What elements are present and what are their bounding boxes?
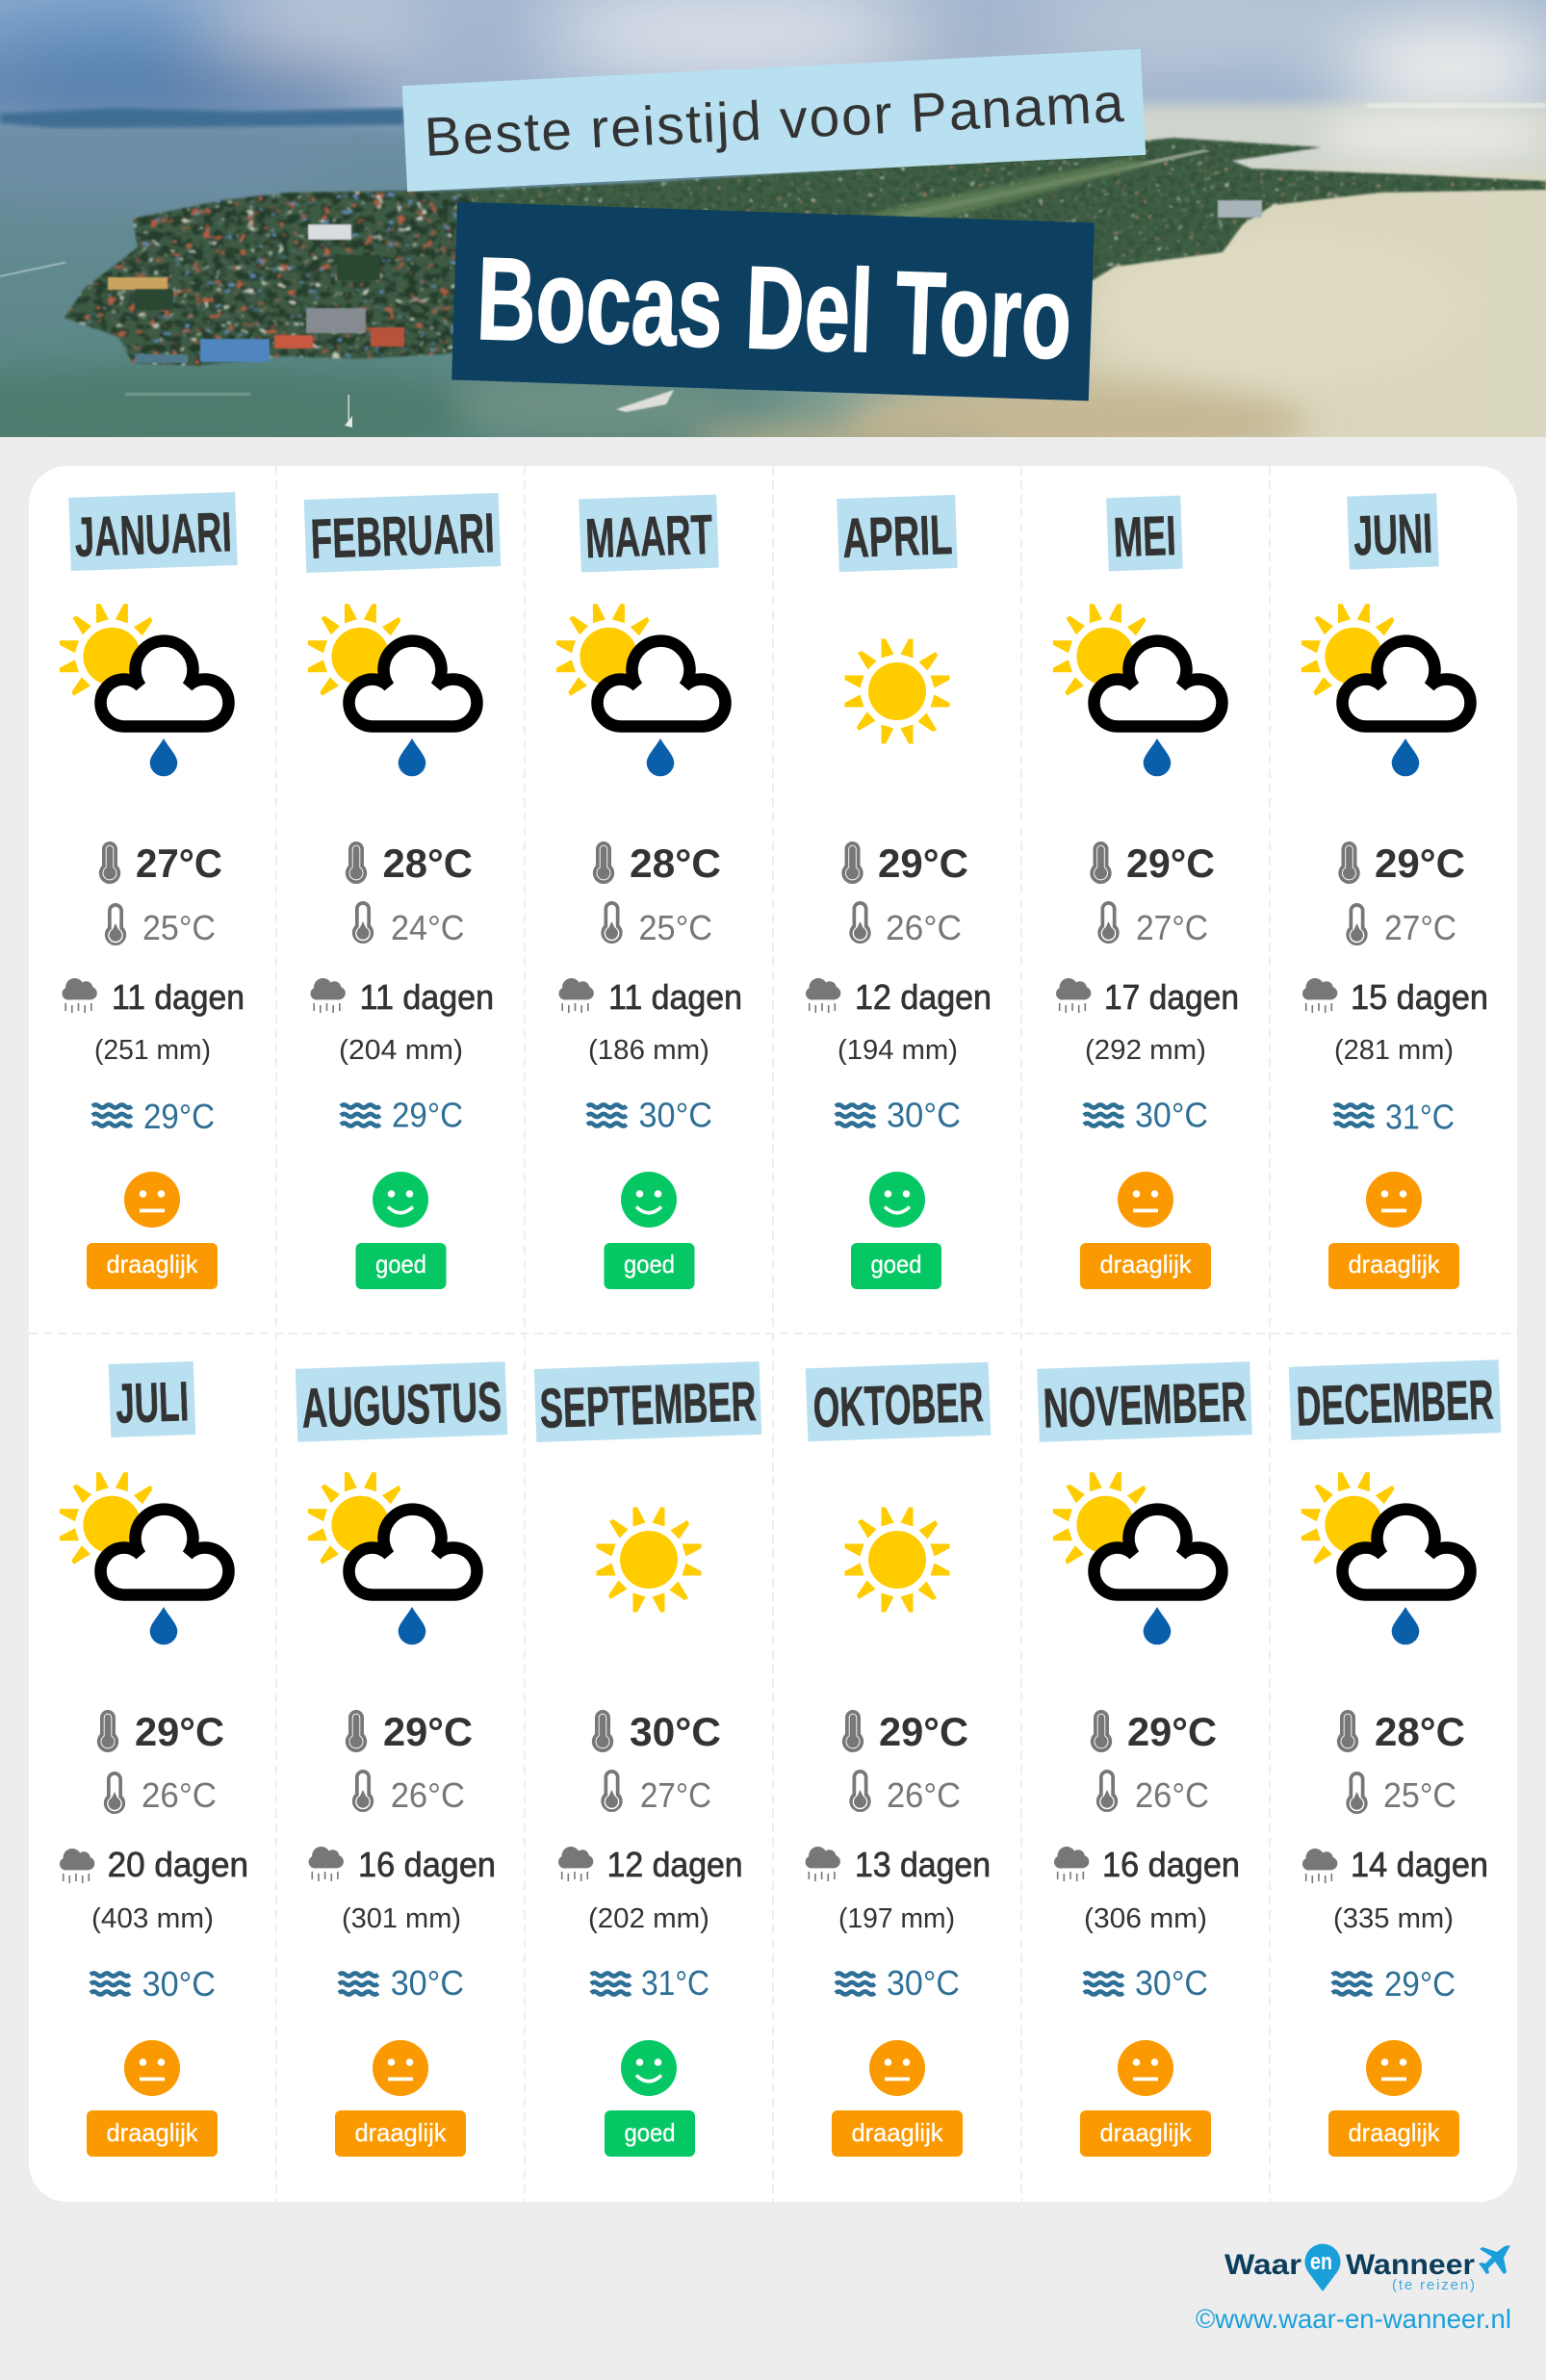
rainfall: (306 mm) — [1084, 1903, 1207, 1934]
heading: April: APRIL — [841, 504, 953, 570]
sea temperature: 30°C — [1135, 1963, 1208, 2003]
sea temperature: 30°C — [887, 1096, 961, 1134]
icon: sun, cloud and rain — [308, 1472, 477, 1644]
month: Juni — [1301, 493, 1488, 1289]
rainy days: 17 dagen — [1104, 977, 1239, 1017]
icon: neutral face — [869, 2040, 925, 2096]
icon: min temperature — [601, 901, 623, 944]
icon: max temperature — [1338, 841, 1360, 884]
rainfall: (204 mm) — [339, 1035, 463, 1066]
icon: airplane — [1479, 2245, 1510, 2274]
rainy days: 20 dagen — [108, 1845, 248, 1884]
rating badge — [605, 2110, 695, 2157]
icon: max temperature — [592, 1710, 613, 1752]
min temperature: 26°C — [1135, 1775, 1209, 1815]
rating badge: draaglijk — [1099, 1250, 1192, 1279]
max temperature: 29°C — [1127, 1709, 1217, 1754]
icon: max temperature — [841, 841, 863, 884]
icon: sun, cloud and rain — [1053, 604, 1223, 776]
icon: max temperature — [99, 841, 120, 884]
icon: max temperature — [593, 841, 614, 884]
rating badge — [851, 1243, 941, 1289]
rainfall: (335 mm) — [1333, 1903, 1454, 1934]
rainy days: 11 dagen — [608, 977, 742, 1017]
rating badge: goed — [624, 1250, 675, 1279]
icon: min temperature — [1096, 1770, 1118, 1812]
sea temperature: 29°C — [392, 1096, 463, 1134]
heading: Augustus — [296, 1361, 507, 1442]
month: April — [806, 495, 992, 1289]
icon: min temperature — [849, 1770, 871, 1812]
heading: Mei — [1106, 496, 1183, 571]
panel: monthly climate table — [29, 466, 1517, 2202]
peninsula — [404, 138, 1546, 349]
max temperature: 28°C — [383, 841, 473, 886]
rainy days: 16 dagen — [1102, 1845, 1240, 1884]
rating badge — [87, 1243, 218, 1289]
rating badge — [1080, 2110, 1211, 2157]
icon: sun, cloud and rain — [60, 604, 229, 776]
heading: November: NOVEMBER — [1043, 1370, 1248, 1440]
icon: min temperature — [601, 1770, 623, 1812]
rating badge — [1328, 1243, 1459, 1289]
title banner — [451, 202, 1095, 401]
month: Juli — [60, 1361, 248, 2157]
max temperature: 29°C — [1375, 841, 1465, 886]
heading: September: SEPTEMBER — [539, 1370, 758, 1440]
title banner: Bocas Del Toro — [475, 233, 1073, 383]
icon: sun, cloud and rain — [1301, 604, 1471, 776]
heading: September — [534, 1361, 761, 1442]
sea temperature: 30°C — [391, 1963, 464, 2003]
icon: neutral face — [373, 2040, 428, 2096]
rainy days: 14 dagen — [1351, 1845, 1488, 1884]
rainfall: (292 mm) — [1085, 1035, 1206, 1066]
month: Januari — [60, 492, 245, 1289]
heading: Juni: JUNI — [1353, 503, 1433, 567]
rating badge: draaglijk — [106, 2118, 198, 2147]
icon: sun, cloud and rain — [308, 604, 477, 776]
rating badge: draaglijk — [1348, 1250, 1440, 1279]
icon: max temperature — [842, 1710, 863, 1752]
icon: neutral face — [124, 1172, 180, 1228]
rainfall: (251 mm) — [94, 1035, 211, 1066]
icon: min temperature — [352, 1770, 374, 1812]
heading: Februari — [304, 493, 501, 573]
rating badge: draaglijk — [106, 1250, 198, 1279]
icon: min temperature — [849, 901, 871, 944]
max temperature: 29°C — [878, 841, 968, 886]
icon: happy face — [621, 2040, 677, 2096]
heading: Maart — [579, 495, 719, 572]
rating badge — [832, 2110, 963, 2157]
min temperature: 27°C — [640, 1775, 711, 1815]
sea temperature: 31°C — [1385, 1098, 1455, 1136]
icon: rain cloud — [62, 978, 97, 1013]
max temperature: 28°C — [630, 841, 721, 886]
min temperature: 24°C — [391, 908, 464, 947]
rainfall: (186 mm) — [588, 1035, 709, 1066]
heading: Maart: MAART — [584, 504, 713, 570]
rating badge: goed — [375, 1250, 426, 1279]
icon: rain cloud — [1056, 978, 1091, 1013]
icon: min temperature — [104, 1772, 125, 1814]
icon: rain cloud — [1302, 1849, 1337, 1883]
icon: sun — [845, 1508, 949, 1612]
icon: waves — [90, 1974, 130, 1995]
sea temperature: 29°C — [143, 1097, 215, 1136]
month: Augustus — [296, 1361, 507, 2157]
subtitle banner: Beste reistijd voor Panama — [423, 72, 1125, 168]
logo: Waar en Wanneer — [1224, 2244, 1510, 2293]
heading: Januari — [68, 492, 238, 571]
max temperature: 29°C — [879, 1709, 968, 1754]
min temperature: 26°C — [887, 1775, 961, 1815]
heading: Juli — [109, 1361, 195, 1437]
icon: rain cloud — [806, 978, 840, 1013]
max temperature: 29°C — [1126, 841, 1215, 886]
icon: map pin — [1305, 2244, 1341, 2291]
heading: Oktober: OKTOBER — [812, 1371, 985, 1439]
icon: max temperature — [1337, 1710, 1358, 1752]
icon: rain cloud — [806, 1847, 840, 1881]
icon: waves — [1332, 1974, 1372, 1995]
icon: rain cloud — [309, 1847, 344, 1881]
min temperature: 25°C — [142, 908, 216, 947]
month: September — [534, 1361, 761, 2157]
min temperature: 26°C — [391, 1775, 465, 1815]
icon: min temperature — [1346, 1772, 1368, 1814]
month: Mei — [1053, 496, 1239, 1289]
icon: rain cloud — [1302, 978, 1337, 1013]
icon: neutral face — [1118, 2040, 1173, 2096]
icon: happy face — [373, 1172, 428, 1228]
month: Februari — [304, 493, 501, 1289]
heading: Juni — [1347, 493, 1439, 570]
icon: max temperature — [1091, 1710, 1112, 1752]
month: November — [1037, 1361, 1252, 2157]
logo: Waar en Wanneer: Wanneer — [1346, 2249, 1475, 2281]
icon: happy face — [621, 1172, 677, 1228]
rating badge — [605, 1243, 695, 1289]
icon: waves — [836, 1974, 875, 1995]
rating badge — [1328, 2110, 1459, 2157]
icon: min temperature — [1346, 903, 1368, 945]
icon: sun, cloud and rain — [1301, 1472, 1471, 1644]
heading: November — [1037, 1361, 1252, 1442]
rainy days: 15 dagen — [1351, 977, 1488, 1017]
icon: sun, cloud and rain — [60, 1472, 229, 1644]
month: Maart — [556, 495, 742, 1289]
rainy days: 12 dagen — [607, 1845, 743, 1884]
icon: sun — [845, 639, 949, 743]
icon: min temperature — [1097, 901, 1120, 944]
icon: neutral face — [1366, 1172, 1422, 1228]
icon: rain cloud — [60, 1849, 94, 1883]
sea temperature: 30°C — [142, 1964, 216, 2004]
rainfall: (301 mm) — [342, 1903, 461, 1934]
rainfall: (281 mm) — [1334, 1035, 1454, 1066]
heading: April — [837, 495, 958, 572]
icon: waves — [836, 1105, 875, 1126]
rating badge: draaglijk — [851, 2118, 943, 2147]
heading: Oktober — [806, 1362, 991, 1441]
icon: max temperature — [346, 1710, 367, 1752]
icon: min temperature — [105, 903, 126, 945]
rating badge — [356, 1243, 447, 1289]
sea temperature: 31°C — [641, 1963, 709, 2003]
rainfall: (403 mm) — [91, 1903, 214, 1934]
rainfall: (194 mm) — [837, 1035, 958, 1066]
min temperature: 25°C — [1383, 1775, 1456, 1815]
icon: sun, cloud and rain — [1053, 1472, 1223, 1644]
min temperature: 27°C — [1384, 908, 1456, 947]
rainy days: 12 dagen — [855, 977, 992, 1017]
subtitle banner — [402, 49, 1146, 192]
rating badge — [335, 2110, 466, 2157]
sea temperature: 30°C — [1135, 1096, 1208, 1134]
icon: max temperature — [97, 1710, 118, 1752]
icon: waves — [339, 1974, 378, 1995]
icon: rain cloud — [1054, 1847, 1089, 1881]
heading: Februari: FEBRUARI — [310, 502, 496, 571]
max temperature: 29°C — [135, 1709, 224, 1754]
icon: waves — [591, 1974, 631, 1995]
icon: neutral face — [1366, 2040, 1422, 2096]
sea temperature: 30°C — [887, 1963, 960, 2003]
logo: Waar en Wanneer: (te reizen) — [1392, 2277, 1475, 2293]
rating badge: goed — [870, 1250, 922, 1279]
sea temperature: 29°C — [1384, 1964, 1456, 2004]
max temperature: 28°C — [1375, 1709, 1465, 1754]
max temperature: 27°C — [136, 841, 222, 886]
icon: min temperature — [352, 901, 374, 944]
sea temperature: 30°C — [639, 1096, 712, 1134]
rainy days: 11 dagen — [112, 977, 245, 1017]
month: Oktober — [806, 1362, 991, 2157]
logo: Waar en Wanneer: Waar — [1224, 2249, 1301, 2281]
icon: waves — [92, 1105, 132, 1126]
icon: neutral face — [124, 2040, 180, 2096]
min temperature: 26°C — [142, 1775, 217, 1815]
min temperature: 26°C — [886, 908, 962, 947]
month: December — [1289, 1359, 1501, 2157]
icon: happy face — [869, 1172, 925, 1228]
rating badge — [1080, 1243, 1211, 1289]
icon: max temperature — [346, 841, 367, 884]
icon: rain cloud — [558, 1847, 593, 1881]
icon: waves — [1334, 1105, 1374, 1126]
icon: rain cloud — [310, 978, 346, 1013]
rainfall: (202 mm) — [588, 1903, 709, 1934]
town — [64, 191, 472, 366]
icon: waves — [341, 1105, 380, 1126]
heading: Juli: JULI — [115, 1370, 190, 1436]
max temperature: 30°C — [630, 1709, 721, 1754]
icon: rain cloud — [558, 978, 594, 1013]
rating badge: draaglijk — [354, 2118, 447, 2147]
icon: neutral face — [1118, 1172, 1173, 1228]
rainy days: 13 dagen — [855, 1845, 991, 1884]
icon: max temperature — [1090, 841, 1112, 884]
icon: waves — [1084, 1105, 1123, 1126]
website credit: ©www.waar-en-wanneer.nl — [1196, 2304, 1511, 2334]
rainy days: 16 dagen — [358, 1845, 496, 1884]
logo: Waar en Wanneer: en — [1310, 2249, 1332, 2275]
rating badge: draaglijk — [1099, 2118, 1192, 2147]
heading: Mei: MEI — [1113, 504, 1177, 569]
rating badge: goed — [624, 2118, 676, 2147]
header photo: aerial view of Bocas del Toro — [0, 0, 1546, 437]
icon: waves — [1084, 1974, 1123, 1995]
rainy days: 11 dagen — [360, 977, 494, 1017]
rating badge — [87, 2110, 218, 2157]
heading: Augustus: AUGUSTUS — [300, 1370, 502, 1440]
max temperature: 29°C — [383, 1709, 473, 1754]
icon: sun, cloud and rain — [556, 604, 726, 776]
icon: sun — [597, 1508, 701, 1612]
min temperature: 25°C — [639, 908, 712, 947]
min temperature: 27°C — [1136, 908, 1208, 947]
rainfall: (197 mm) — [838, 1903, 955, 1934]
icon: waves — [587, 1105, 627, 1126]
rating badge: draaglijk — [1348, 2118, 1440, 2147]
heading: Januari: JANUARI — [74, 501, 233, 569]
